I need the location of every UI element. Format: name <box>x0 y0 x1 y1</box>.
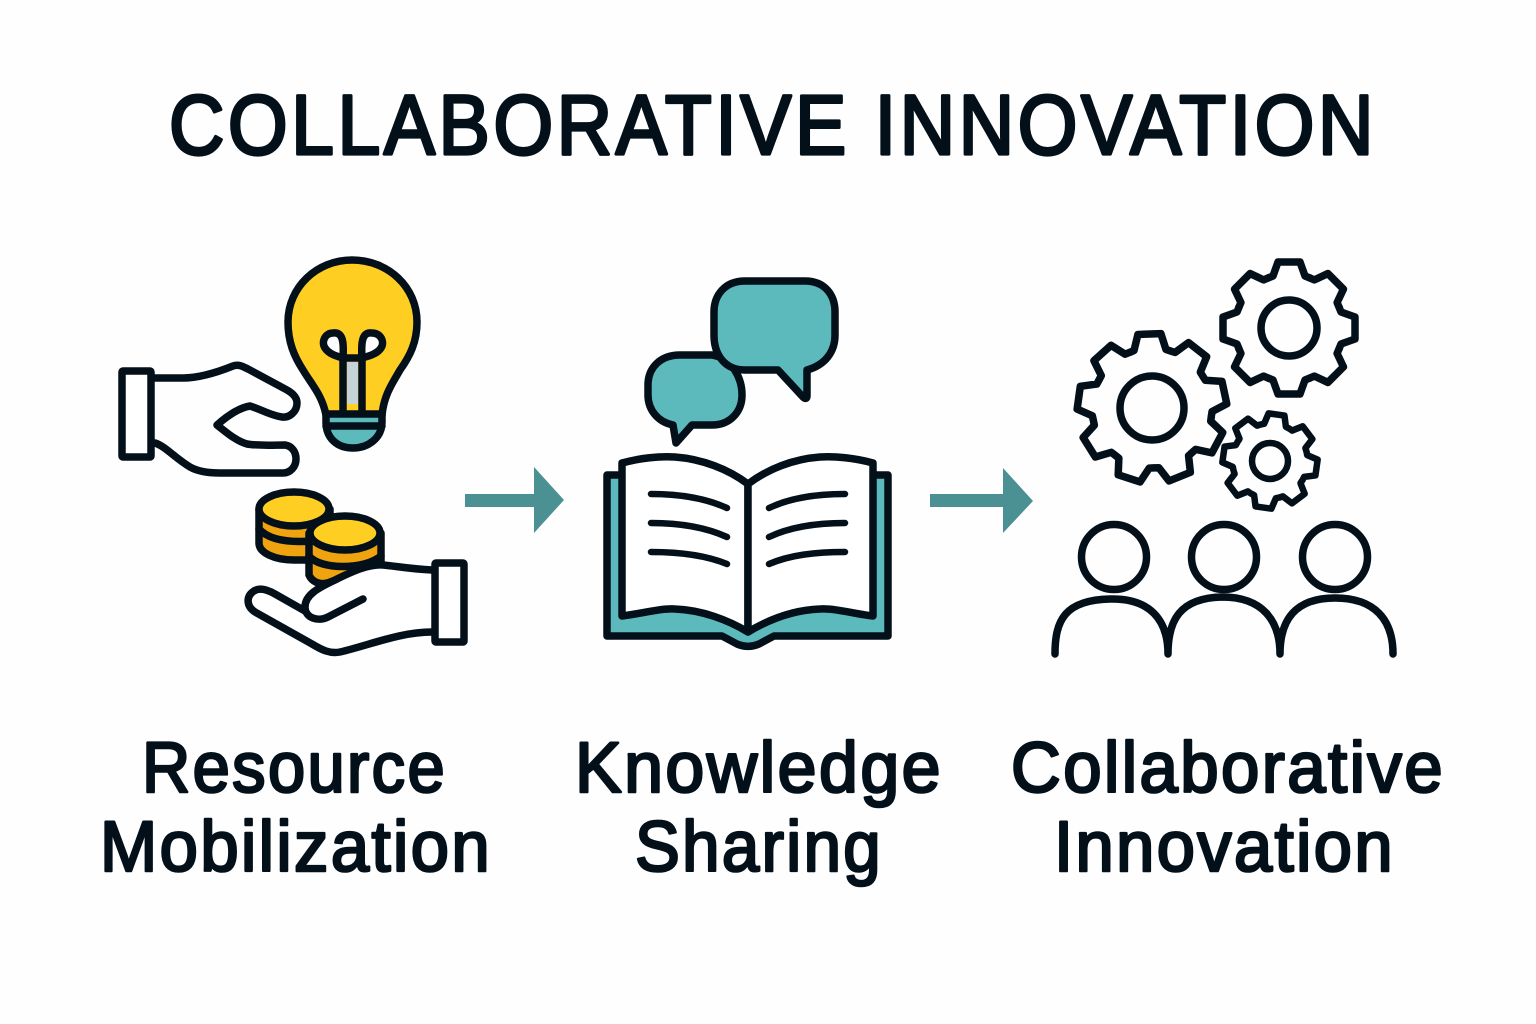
label: knowledge sharing <box>575 729 943 887</box>
panel: knowledge sharing <box>607 281 888 646</box>
icon: small gear <box>1222 413 1318 509</box>
label: resource mobilization: Mobilization <box>100 808 492 887</box>
icon: upper gear <box>1223 262 1355 394</box>
icon: team of three people <box>1055 524 1393 654</box>
title: COLLABORATIVE INNOVATION <box>169 78 1377 172</box>
icon: coin stacks <box>259 492 381 584</box>
label: collaborative innovation: Innovation <box>1054 808 1395 887</box>
label: collaborative innovation: Collaborative <box>1011 729 1445 808</box>
icon: light bulb <box>288 260 417 448</box>
label: knowledge sharing: Sharing <box>635 808 883 887</box>
icon: receiving hand <box>248 563 464 653</box>
label: resource mobilization: Resource <box>142 729 447 808</box>
icon: large gear <box>1076 333 1229 485</box>
label: resource mobilization <box>100 729 492 887</box>
label: collaborative innovation <box>1011 729 1445 887</box>
panel: collaborative innovation <box>1055 262 1393 654</box>
arrow: knowledge to innovation <box>930 468 1033 533</box>
icon: large speech bubble <box>714 281 835 398</box>
icon: open book <box>607 457 888 646</box>
icon: giving hand <box>122 365 297 473</box>
label: knowledge sharing: Knowledge <box>575 729 943 808</box>
arrow: resource to knowledge <box>465 467 564 533</box>
icon: small speech bubble <box>648 355 742 443</box>
panel: resource mobilization <box>122 260 464 653</box>
